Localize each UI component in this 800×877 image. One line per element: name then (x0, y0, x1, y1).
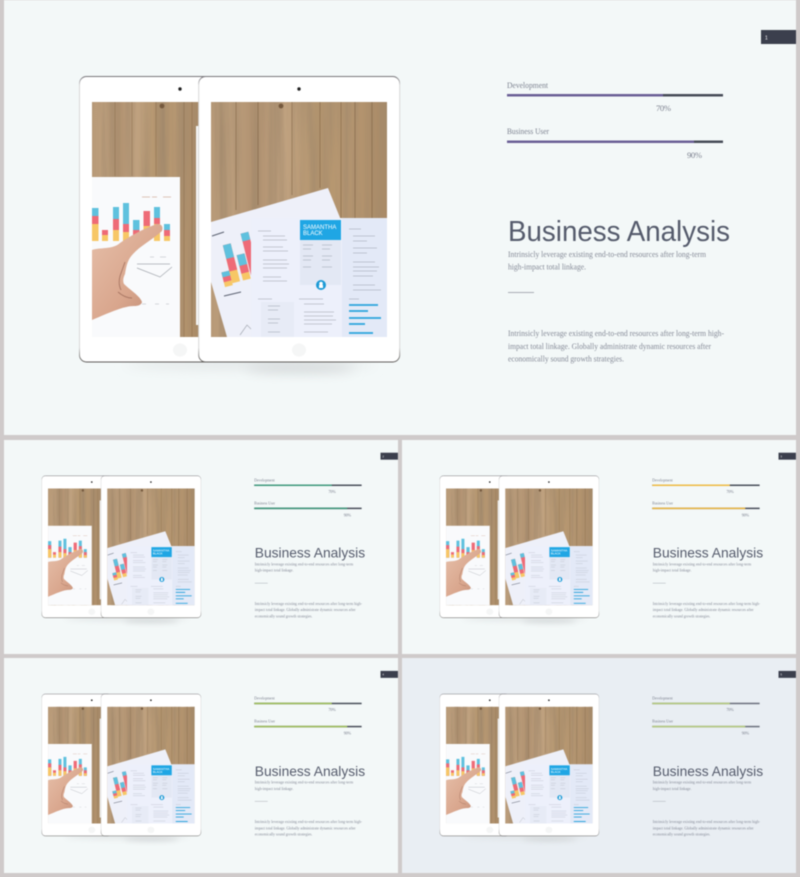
page number badge (779, 671, 796, 678)
progress bar: business user (507, 126, 723, 160)
page number badge: 1 (765, 36, 768, 42)
icon: tablets (42, 476, 201, 623)
progress bar: business user: 90% (344, 731, 352, 736)
panel: grey-blue variant slide (402, 658, 796, 873)
progress bar: business user (652, 500, 760, 517)
body text: economically sound growth strategies. (255, 613, 312, 618)
body text: Intrinsicly leverage existing end-to-end resources after long-term high- (653, 819, 761, 824)
resume name label: SAMANTHA (551, 767, 567, 771)
progress bar: business user: 90% (687, 150, 702, 160)
page number badge: 5 (781, 674, 783, 677)
progress bar: business user: 90% (344, 512, 352, 517)
body text: impact total linkage. Globally administrate dynamic resources after (508, 342, 711, 351)
progress bar: development: 70% (726, 489, 734, 494)
panel: yellow variant slide (402, 440, 796, 654)
body text: economically sound growth strategies. (653, 613, 710, 618)
subtitle text: high-impact total linkage. (255, 568, 294, 573)
divider (653, 582, 666, 584)
panel: main slide (4, 0, 796, 435)
body text: Intrinsicly leverage existing end-to-end resources after long-term high- (653, 601, 761, 606)
divider (508, 292, 534, 293)
subtitle text: Intrinsicly leverage existing end-to-end resources after long-term (653, 780, 752, 785)
page number badge: 3 (781, 455, 783, 458)
body text: impact total linkage. Globally administrate dynamic resources after (653, 607, 754, 612)
progress bar: development: Development (507, 80, 549, 90)
title: Business Analysis (255, 764, 365, 780)
progress bar: development (254, 696, 362, 712)
progress bar: business user: Business User (254, 500, 276, 505)
progress bar: business user (254, 500, 362, 517)
progress bar: development (652, 478, 760, 494)
icon: tablets (440, 476, 599, 623)
title: Business Analysis (653, 764, 763, 780)
body text: economically sound growth strategies. (653, 832, 710, 837)
resume name label: SAMANTHA (153, 767, 169, 771)
icon: tablets (42, 694, 201, 841)
progress bar: business user: Business User (652, 719, 674, 724)
body text: Intrinsicly leverage existing end-to-end resources after long-term high- (508, 329, 724, 338)
subtitle text: high-impact total linkage. (653, 568, 692, 573)
page number badge: 2 (383, 455, 385, 458)
progress bar: development: Development (652, 696, 673, 701)
page number badge (761, 30, 796, 44)
divider (653, 800, 666, 803)
progress bar: business user (652, 719, 760, 736)
icon: tablets (440, 694, 599, 841)
progress bar: development: Development (254, 478, 275, 483)
progress bar: business user: Business User (507, 126, 549, 136)
divider (255, 800, 268, 803)
page number badge (779, 453, 796, 460)
progress bar: business user (254, 719, 362, 736)
subtitle text: high-impact total linkage. (653, 786, 692, 791)
page number badge: 4 (383, 674, 385, 677)
body text: impact total linkage. Globally administrate dynamic resources after (255, 607, 356, 612)
resume name label: BLACK (551, 552, 561, 556)
title: Business Analysis (255, 546, 365, 562)
body text: Intrinsicly leverage existing end-to-end resources after long-term high- (255, 601, 363, 606)
body text: economically sound growth strategies. (255, 832, 312, 837)
progress bar: development (652, 696, 760, 712)
body text: economically sound growth strategies. (508, 354, 624, 364)
subtitle text: Intrinsicly leverage existing end-to-end resources after long-term (508, 250, 706, 259)
progress bar: development: 70% (328, 489, 336, 494)
resume name label: SAMANTHA (551, 549, 567, 553)
subtitle text: high-impact total linkage. (508, 262, 586, 272)
page number badge (381, 453, 398, 460)
progress bar: business user: 90% (742, 512, 750, 517)
resume name label: BLACK (153, 770, 163, 774)
progress bar: development (254, 478, 362, 494)
subtitle text: Intrinsicly leverage existing end-to-end resources after long-term (653, 562, 752, 567)
subtitle text: Intrinsicly leverage existing end-to-end resources after long-term (255, 780, 354, 785)
progress bar: business user: Business User (652, 500, 674, 505)
title: Business Analysis (508, 216, 730, 248)
subtitle text: high-impact total linkage. (255, 786, 294, 791)
progress bar: business user: 90% (742, 731, 750, 736)
body text: Intrinsicly leverage existing end-to-end resources after long-term high- (255, 819, 363, 824)
resume name label: BLACK (551, 770, 561, 774)
progress bar: development: 70% (328, 707, 336, 712)
resume name label: BLACK (303, 231, 323, 237)
progress bar: business user: Business User (254, 719, 276, 724)
panel: green variant slide (4, 440, 398, 654)
icon: tablets with chart photos (80, 76, 400, 372)
progress bar: development: Development (652, 478, 673, 483)
progress bar: development: Development (254, 696, 275, 701)
body text: impact total linkage. Globally administrate dynamic resources after (255, 825, 356, 830)
progress bar: development: 70% (726, 707, 734, 712)
progress bar: development (507, 80, 723, 113)
page number badge (381, 671, 398, 678)
divider (255, 582, 268, 584)
subtitle text: Intrinsicly leverage existing end-to-end resources after long-term (255, 562, 354, 567)
panel: light green variant slide (4, 658, 398, 873)
resume name label: BLACK (153, 552, 163, 556)
title: Business Analysis (653, 546, 763, 562)
body text: impact total linkage. Globally administrate dynamic resources after (653, 825, 754, 830)
resume name label: SAMANTHA (153, 549, 169, 553)
progress bar: development: 70% (656, 103, 671, 113)
resume name label: SAMANTHA (303, 225, 336, 231)
